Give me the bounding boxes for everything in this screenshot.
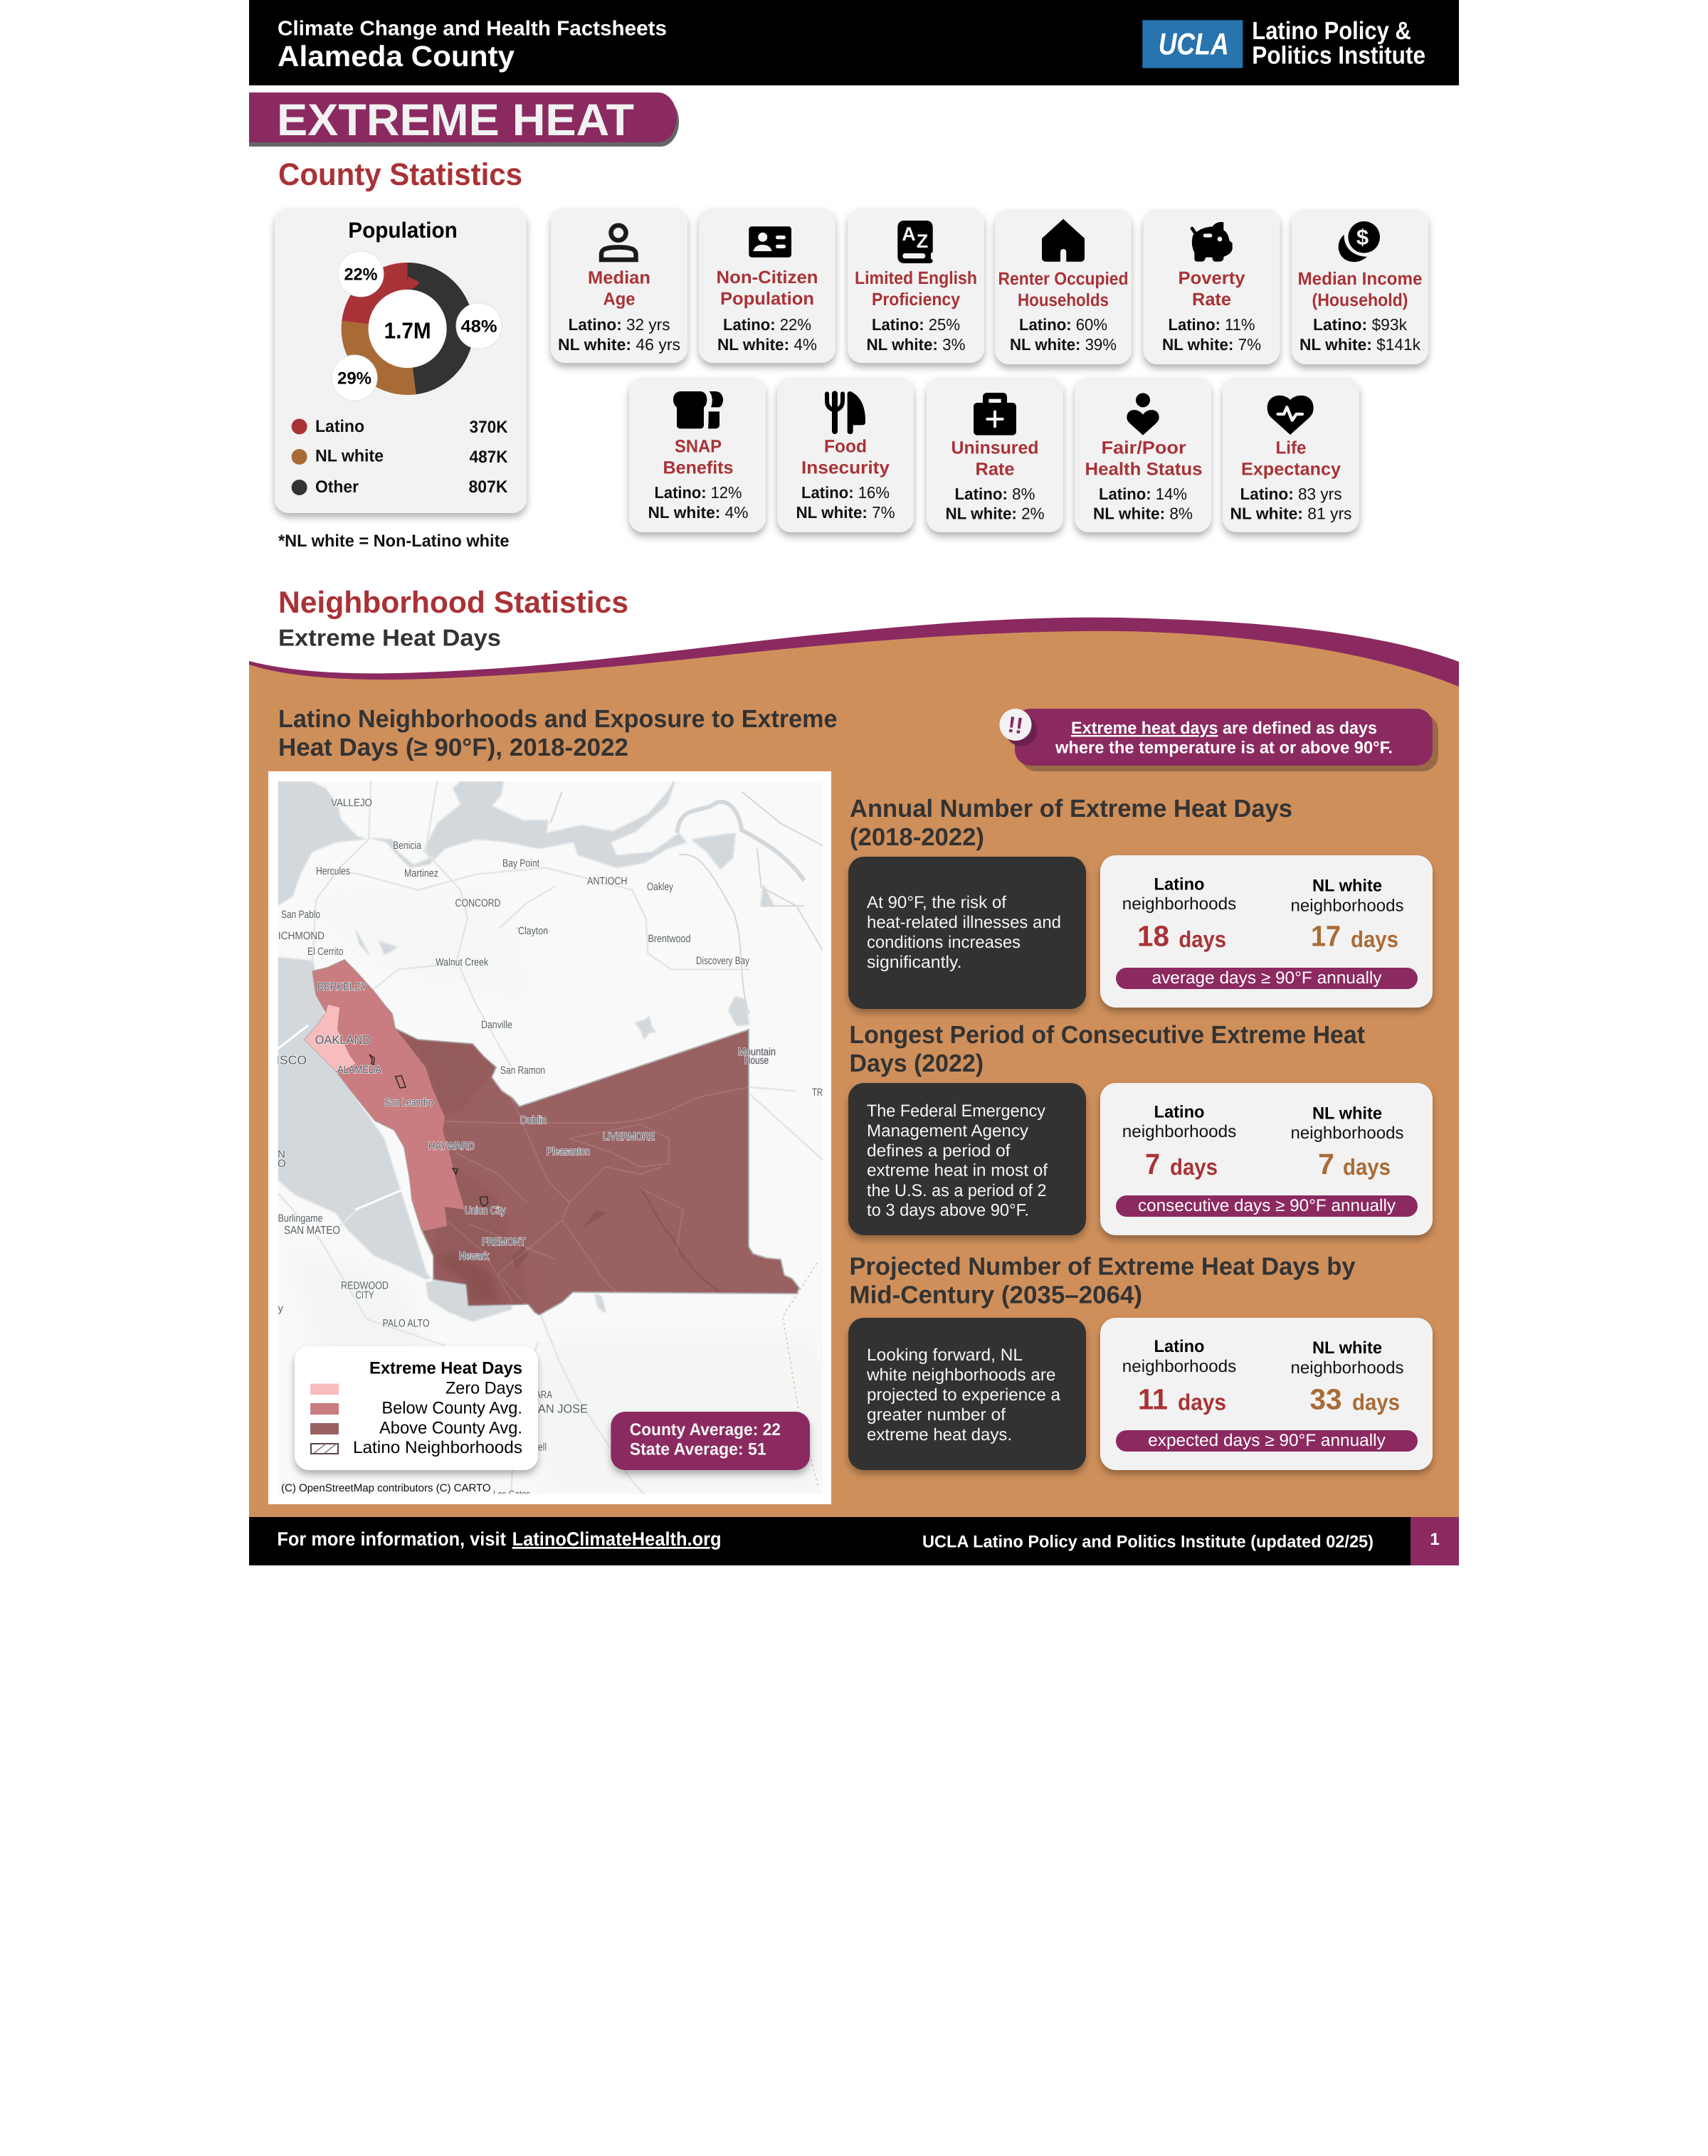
population legend: 807K [468, 477, 508, 497]
population legend: 370K [470, 418, 508, 437]
callout: county and state average: County Average: 22 [630, 1420, 781, 1439]
map place labels: REDWOOD [341, 1279, 389, 1292]
stat card: median age: Median [588, 268, 650, 287]
stat card: life expectancy: Latino: 83 yrs [1240, 485, 1342, 503]
comparison panel [1100, 1083, 1433, 1235]
text panel [848, 857, 1086, 1009]
map place labels: PALO ALTO [383, 1318, 430, 1329]
stat card: median age: NL white: 46 yrs [558, 335, 680, 354]
panel: population [275, 208, 527, 513]
comparison panel: neighborhoods [1122, 1357, 1236, 1376]
comparison panel: expected days ≥ 90°F annually [1148, 1431, 1386, 1450]
footer bar [249, 1517, 1459, 1565]
stat card: life expectancy: Expectancy [1241, 460, 1341, 480]
map place labels: San Pablo [281, 909, 320, 921]
map place labels: Oakley [647, 881, 673, 893]
stat card: life expectancy: NL white: 81 yrs [1230, 504, 1352, 522]
map place labels: Hercules [316, 865, 350, 877]
map place labels: Newark [459, 1250, 489, 1262]
stat card: median income [1292, 209, 1428, 364]
icon: person [601, 226, 636, 260]
stat card: food insecurity [777, 377, 914, 532]
stat card: food insecurity: Food [824, 437, 867, 457]
population legend: Other [315, 477, 359, 497]
stat card: snap benefits: SNAP [675, 437, 722, 457]
comparison panel: neighborhoods [1291, 897, 1403, 915]
map place labels: Dublin [520, 1114, 547, 1126]
map place labels: ANTIOCH [587, 875, 628, 887]
map place labels: ALAMEDA [337, 1064, 381, 1076]
stat card: non-citizen population: Population [720, 289, 814, 309]
text panel: defines a period of [867, 1141, 1011, 1161]
text panel: extreme heat in most of [867, 1161, 1048, 1180]
comparison panel: days [1178, 1389, 1226, 1415]
title banner: extreme heat: EXTREME HEAT [277, 95, 634, 145]
map place labels: N [278, 1148, 285, 1161]
stat card: renter occupied households: Households [1018, 290, 1109, 310]
stat card: fair/poor health status: Health Status [1085, 460, 1203, 480]
icon: dictionary: A [902, 223, 916, 245]
section heading [850, 1252, 1356, 1309]
comparison panel [1100, 855, 1433, 1008]
text panel: Management Agency [867, 1121, 1028, 1141]
comparison panel: NL white [1312, 1338, 1382, 1358]
comparison panel: 18 [1137, 920, 1169, 953]
map place labels: San Leandro [384, 1097, 433, 1109]
comparison panel: NL white [1312, 876, 1382, 895]
stat card: limited english proficiency [848, 208, 984, 363]
callout: extreme heat day definition: Extreme heat days are defined as days [1071, 719, 1377, 738]
population heading: Population [348, 218, 458, 243]
stat card: renter occupied households: Renter Occupied [998, 269, 1129, 289]
section heading [850, 1021, 1365, 1077]
map place labels: SAN JOSE [530, 1402, 588, 1416]
stat card: median income: Median Income [1298, 269, 1423, 289]
comparison panel: Latino [1154, 875, 1204, 894]
panel: map [268, 771, 831, 1504]
icon: fork and knife [827, 391, 865, 434]
section: projected number of extreme heat days [848, 1252, 1433, 1470]
heading: neighborhood statistics [278, 586, 628, 650]
stat card: renter occupied households [995, 209, 1132, 364]
stat card: poverty rate: NL white: 7% [1162, 335, 1261, 354]
population legend [292, 417, 508, 497]
roads [312, 781, 749, 1067]
map place labels: ISCO [276, 1053, 307, 1067]
stat card: limited english proficiency: Latino: 25% [872, 315, 960, 334]
map place labels [271, 797, 823, 1501]
callout: county and state average [611, 1412, 810, 1470]
map place labels: Martinez [404, 867, 438, 879]
map place labels: SAN MATEO [284, 1225, 340, 1237]
heading: neighborhood statistics: Neighborhood Statistics [278, 586, 628, 620]
map place labels: O [278, 1158, 286, 1170]
donut chart: 29% [337, 369, 371, 389]
stat card: poverty rate: Rate [1192, 290, 1231, 310]
population legend: Latino [315, 417, 364, 436]
text panel [848, 1083, 1086, 1235]
footer link text: For more information, visit [277, 1528, 506, 1550]
heading: map title: Latino Neighborhoods and Exposure to Extreme [278, 705, 837, 733]
stat card: median income: (Household) [1312, 290, 1408, 310]
stat card: fair/poor health status [1075, 377, 1211, 532]
stat card: snap benefits: Benefits [663, 458, 733, 478]
map place labels: BERKELEY [317, 981, 367, 993]
stat card: non-citizen population [699, 208, 835, 363]
comparison panel: Latino [1154, 1337, 1204, 1356]
map place labels: Brentwood [648, 933, 690, 945]
text panel: white neighborhoods are [866, 1365, 1055, 1385]
text panel: Looking forward, NL [867, 1346, 1023, 1365]
stat card: limited english proficiency: Limited English [855, 268, 977, 288]
stat card: renter occupied households: NL white: 39% [1010, 335, 1117, 354]
population legend: 487K [470, 448, 508, 467]
logo: UCLA Latino Policy and Politics Institute: UCLA [1159, 28, 1229, 62]
stat card: life expectancy [1223, 377, 1359, 532]
map place labels: Los Gatos [493, 1489, 530, 1501]
stat card: poverty rate [1143, 209, 1280, 364]
comparison panel: NL white [1312, 1104, 1382, 1123]
map place labels: Danville [481, 1019, 512, 1031]
map place labels: RICHMOND [271, 930, 325, 942]
choropleth: county above average [305, 960, 799, 1315]
callout: extreme heat day definition: where the temperature is at or above 90°F. [1055, 739, 1393, 758]
comparison panel: 7 [1318, 1148, 1334, 1180]
map place labels: Mountain [738, 1046, 776, 1058]
text panel: to 3 days above 90°F. [867, 1201, 1029, 1220]
comparison panel: 33 [1309, 1383, 1342, 1416]
footer link text: LatinoClimateHealth.org [512, 1528, 722, 1550]
donut chart [332, 251, 502, 401]
population legend: NL white [315, 447, 384, 465]
comparison panel: days [1179, 926, 1226, 952]
section heading: Annual Number of Extreme Heat Days [850, 795, 1292, 823]
stat card: snap benefits: Latino: 12% [655, 483, 742, 502]
stat card: median age: Age [603, 289, 636, 309]
stat card: snap benefits [629, 377, 766, 532]
comparison panel: neighborhoods [1122, 894, 1236, 914]
logo: UCLA Latino Policy and Politics Institute: Latino Policy & [1252, 17, 1411, 45]
donut chart: 48% [461, 317, 497, 336]
stat card: uninsured rate [927, 377, 1063, 532]
comparison panel: 7 [1145, 1148, 1160, 1180]
map legend: Zero Days [446, 1379, 522, 1398]
logo: UCLA Latino Policy and Politics Institute: Politics Institute [1252, 41, 1425, 69]
water: bays and delta [278, 781, 775, 1322]
map place labels: FREMONT [482, 1236, 525, 1248]
comparison panel: average days ≥ 90°F annually [1151, 968, 1382, 988]
orange background with wave [249, 618, 1459, 1517]
comparison panel: neighborhoods [1122, 1122, 1236, 1141]
stat card: non-citizen population: Non-Citizen [716, 268, 818, 287]
map place labels: Benicia [393, 840, 422, 852]
stat card: median income: Latino: $93k [1313, 315, 1407, 334]
stat card: limited english proficiency: Proficiency [872, 290, 960, 310]
icon: dictionary [897, 221, 933, 263]
comparison panel: 17 [1311, 920, 1341, 953]
page number [1411, 1517, 1459, 1565]
section heading: (2018-2022) [850, 823, 984, 851]
stat card: median income: NL white: $141k [1300, 335, 1420, 354]
heading: map title: Heat Days (≥ 90°F), 2018-2022 [278, 734, 628, 761]
logo: UCLA Latino Policy and Politics Institute [1142, 17, 1425, 69]
comparison panel [1100, 1318, 1433, 1470]
stat card: food insecurity: NL white: 7% [796, 503, 895, 522]
icon: medical kit [974, 393, 1016, 435]
footer credit: UCLA Latino Policy and Politics Institute (updated 02/25) [922, 1533, 1374, 1551]
text panel: At 90°F, the risk of [867, 893, 1006, 912]
map place labels: Pleasanton [547, 1146, 590, 1158]
stat card: poverty rate: Latino: 11% [1169, 315, 1255, 334]
map place labels: VALLEJO [331, 797, 372, 809]
stat card: poverty rate: Poverty [1179, 268, 1245, 288]
stat card: non-citizen population: NL white: 4% [717, 335, 817, 354]
stat card: uninsured rate: Rate [975, 460, 1015, 480]
map place labels: CITY [356, 1289, 374, 1301]
text panel: conditions increases [867, 933, 1021, 952]
icon: id card [749, 226, 791, 258]
header bar [249, 0, 1459, 85]
subheading: extreme heat days: Extreme Heat Days [278, 625, 501, 650]
section: longest period of consecutive extreme heat [848, 1021, 1433, 1235]
map place labels: y [278, 1302, 283, 1315]
section heading: Mid-Century (2035–2064) [850, 1281, 1142, 1309]
text panel: extreme heat days. [867, 1425, 1012, 1444]
text panel: The Federal Emergency [867, 1101, 1045, 1121]
map place labels: Burlingame [278, 1212, 323, 1225]
latino neighborhoods outlines [369, 1055, 488, 1207]
map place labels: Bay Point [502, 857, 540, 870]
county name: Alameda County [278, 40, 515, 73]
text panel: significantly. [867, 953, 962, 972]
map place labels: HAYWARD [428, 1140, 475, 1153]
icon: house [1042, 219, 1085, 262]
stat card: snap benefits: NL white: 4% [648, 503, 749, 522]
callout: extreme heat day definition [999, 709, 1438, 771]
map place labels: Clayton [518, 925, 548, 937]
icon: coins: $ [1356, 225, 1369, 250]
footnote: *NL white = Non-Latino white [278, 532, 510, 551]
donut chart: 1.7M [384, 317, 431, 343]
map place labels: House [744, 1055, 769, 1067]
comparison panel: days [1170, 1154, 1218, 1180]
icon: piggy bank [1192, 222, 1233, 262]
stat card: fair/poor health status: Fair/Poor [1102, 438, 1186, 458]
comparison panel: days [1352, 1389, 1400, 1415]
map place labels: ARA [535, 1389, 552, 1401]
stat card: fair/poor health status: NL white: 8% [1093, 504, 1193, 522]
map legend [295, 1346, 538, 1470]
comparison panel: days [1343, 1154, 1391, 1180]
icon: person with heart [1127, 393, 1159, 435]
map legend: Latino Neighborhoods [353, 1438, 522, 1457]
map place labels: Well [530, 1442, 547, 1454]
choropleth: zero days [305, 1005, 356, 1071]
map attribution: (C) OpenStreetMap contributors (C) CARTO [281, 1482, 491, 1494]
icon: heart pulse [1267, 396, 1314, 435]
section: annual number of extreme heat days [848, 795, 1433, 1009]
map place labels: CONCORD [455, 897, 501, 909]
comparison panel: Latino [1154, 1103, 1204, 1121]
icon: alert [999, 709, 1038, 746]
stat card: food insecurity: Insecurity [801, 458, 890, 478]
stat card: uninsured rate: Uninsured [951, 438, 1039, 458]
page number: 1 [1430, 1530, 1440, 1549]
stat card: renter occupied households: Latino: 60% [1019, 315, 1107, 334]
comparison panel: consecutive days ≥ 90°F annually [1138, 1196, 1396, 1215]
stat card: uninsured rate: NL white: 2% [945, 504, 1045, 522]
icon: alert: !! [1006, 712, 1025, 739]
stat card: uninsured rate: Latino: 8% [955, 485, 1035, 503]
comparison panel: days [1351, 926, 1398, 952]
comparison panel: neighborhoods [1291, 1124, 1403, 1143]
map legend: Above County Avg. [379, 1418, 522, 1437]
text panel [848, 1318, 1086, 1470]
section heading: Projected Number of Extreme Heat Days by [850, 1252, 1356, 1281]
map place labels: OAKLAND [315, 1033, 371, 1047]
stat card: median age: Latino: 32 yrs [568, 315, 670, 334]
text panel: heat-related illnesses and [867, 913, 1061, 932]
icon: bread [673, 391, 723, 428]
map legend: Below County Avg. [381, 1399, 522, 1417]
stat card: limited english proficiency: NL white: 3% [867, 335, 966, 354]
map place labels: Walnut Creek [436, 956, 488, 968]
comparison panel: 11 [1138, 1383, 1168, 1416]
map place labels: TR [812, 1087, 823, 1099]
text panel: projected to experience a [867, 1385, 1061, 1405]
map place labels: San Ramon [500, 1064, 545, 1077]
stat card: life expectancy: Life [1275, 438, 1307, 458]
icon: coins [1339, 221, 1380, 262]
comparison panel: neighborhoods [1291, 1358, 1403, 1378]
stat card: non-citizen population: Latino: 22% [723, 315, 811, 334]
map place labels: Discovery Bay [696, 955, 749, 967]
donut chart: 22% [344, 265, 377, 285]
section heading [850, 795, 1292, 851]
section heading: Days (2022) [850, 1050, 984, 1077]
icon: dictionary: Z [917, 231, 928, 252]
series title: Climate Change and Health Factsheets [278, 17, 667, 40]
text panel: the U.S. as a period of 2 [867, 1181, 1046, 1200]
footer link text [277, 1528, 722, 1550]
heading: county statistics: County Statistics [278, 157, 522, 192]
stat card: food insecurity: Latino: 16% [801, 483, 890, 502]
text panel: greater number of [867, 1405, 1006, 1425]
stat card: median age [551, 208, 687, 363]
map legend: Extreme Heat Days [369, 1359, 522, 1378]
map place labels: LIVERMORE [603, 1131, 655, 1143]
map place labels: El Cerrito [307, 946, 343, 958]
section heading: Longest Period of Consecutive Extreme Heat [850, 1021, 1365, 1049]
callout: county and state average: State Average: 51 [630, 1440, 766, 1459]
rivers [550, 791, 823, 1014]
heading: map title [278, 705, 837, 761]
stat card: fair/poor health status: Latino: 14% [1099, 485, 1187, 503]
map place labels: Union City [465, 1205, 506, 1217]
choropleth: below county average [305, 960, 465, 1231]
